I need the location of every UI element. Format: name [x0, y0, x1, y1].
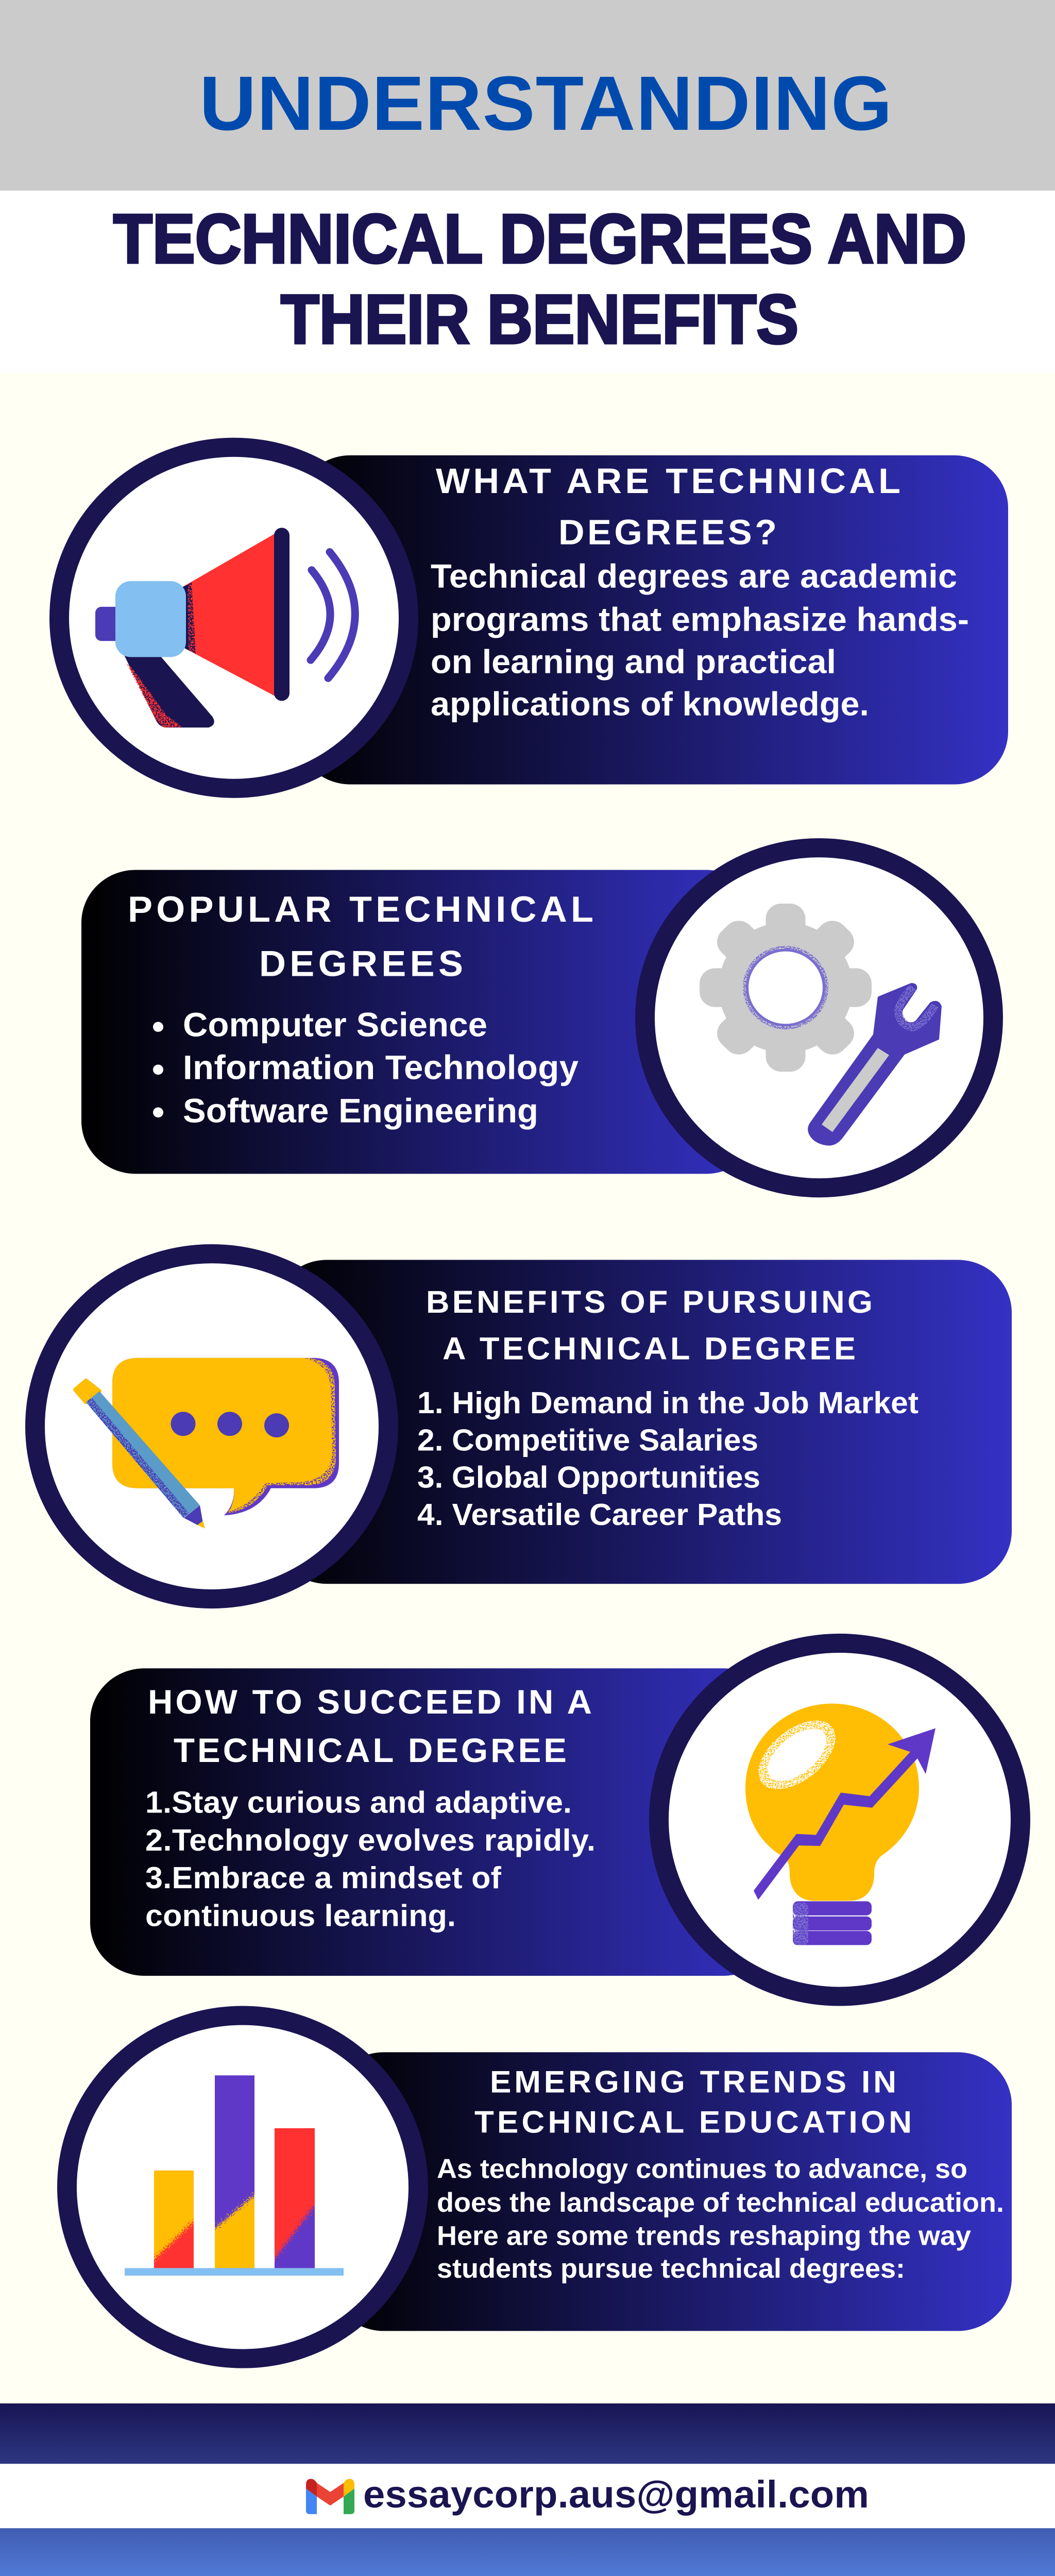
icon circle [67, 2015, 418, 2359]
icon circle [35, 1254, 388, 1599]
panel: benefits of pursuing a technical degree [35, 1254, 1012, 1599]
icon: speech bubble [112, 1358, 339, 1515]
heading: DEGREES? [558, 512, 777, 552]
footer [0, 2403, 1055, 2576]
heading [474, 2064, 912, 2139]
heading [128, 890, 593, 984]
body text: As technology continues to advance, so [437, 2154, 967, 2184]
heading: A TECHNICAL DEGREE [443, 1331, 856, 1367]
panel: what are technical degrees [59, 447, 1008, 788]
numbered list: 1. High Demand in the Job Market [417, 1386, 918, 1420]
title [113, 200, 966, 358]
body text: applications of knowledge. [431, 685, 869, 723]
panel: emerging trends [0, 2015, 1055, 2576]
body list: 3.Embrace a mindset of [145, 1860, 502, 1895]
icon: pencil [75, 1381, 205, 1529]
body text: programs that emphasize hands- [431, 601, 969, 638]
body text: Technical degrees are academic [431, 557, 957, 595]
body text: on learning and practical [431, 643, 836, 680]
icon: gear [700, 904, 872, 1072]
body text [431, 557, 969, 723]
body list: 2.Technology evolves rapidly. [145, 1822, 595, 1857]
icon: light bulb [745, 1704, 919, 1945]
numbered list: 2. Competitive Salaries [417, 1423, 758, 1457]
body text: students pursue technical degrees: [437, 2253, 905, 2284]
body list: continuous learning. [145, 1898, 456, 1933]
body list [145, 1785, 595, 1933]
bullet list: Software Engineering [183, 1092, 538, 1130]
bullet list: Computer Science [183, 1006, 487, 1044]
icon circle [659, 1643, 1020, 1996]
heading: TECHNICAL DEGREE [174, 1732, 567, 1770]
body text: does the landscape of technical education. [437, 2188, 1004, 2218]
heading: DEGREES [259, 944, 463, 984]
icon: megaphone [95, 528, 355, 727]
heading [426, 1285, 873, 1367]
body text: Here are some trends reshaping the way [437, 2221, 971, 2251]
icon: growth arrow [754, 1728, 935, 1900]
icon: gmail [306, 2479, 354, 2514]
body text [437, 2154, 1004, 2284]
title: TECHNICAL DEGREES AND [113, 200, 966, 277]
numbered list: 3. Global Opportunities [417, 1460, 760, 1495]
icon circle [645, 848, 993, 1188]
heading [148, 1684, 592, 1770]
heading: TECHNICAL EDUCATION [474, 2105, 912, 2139]
heading: understanding: UNDERSTANDING [199, 61, 892, 147]
header band [0, 0, 1055, 191]
bullet list: Information Technology [183, 1049, 578, 1087]
numbered list [417, 1386, 918, 1532]
heading: EMERGING TRENDS IN [490, 2064, 896, 2099]
heading: POPULAR TECHNICAL [128, 890, 593, 930]
bullet list [153, 1006, 578, 1130]
title band [0, 191, 1055, 374]
heading: BENEFITS OF PURSUING [426, 1285, 873, 1320]
heading [436, 461, 900, 552]
contact email: essaycorp.aus@gmail.com [363, 2473, 869, 2516]
heading: HOW TO SUCCEED IN A [148, 1684, 592, 1721]
title: THEIR BENEFITS [281, 280, 798, 358]
heading: WHAT ARE TECHNICAL [436, 461, 900, 501]
icon circle [59, 447, 409, 788]
numbered list: 4. Versatile Career Paths [417, 1498, 782, 1532]
icon: wrench [808, 983, 942, 1146]
panel: popular technical degrees [81, 848, 993, 1188]
body list: 1.Stay curious and adaptive. [145, 1785, 572, 1819]
chart icon: bars [125, 2075, 344, 2276]
panel: how to succeed [90, 1643, 1020, 1996]
